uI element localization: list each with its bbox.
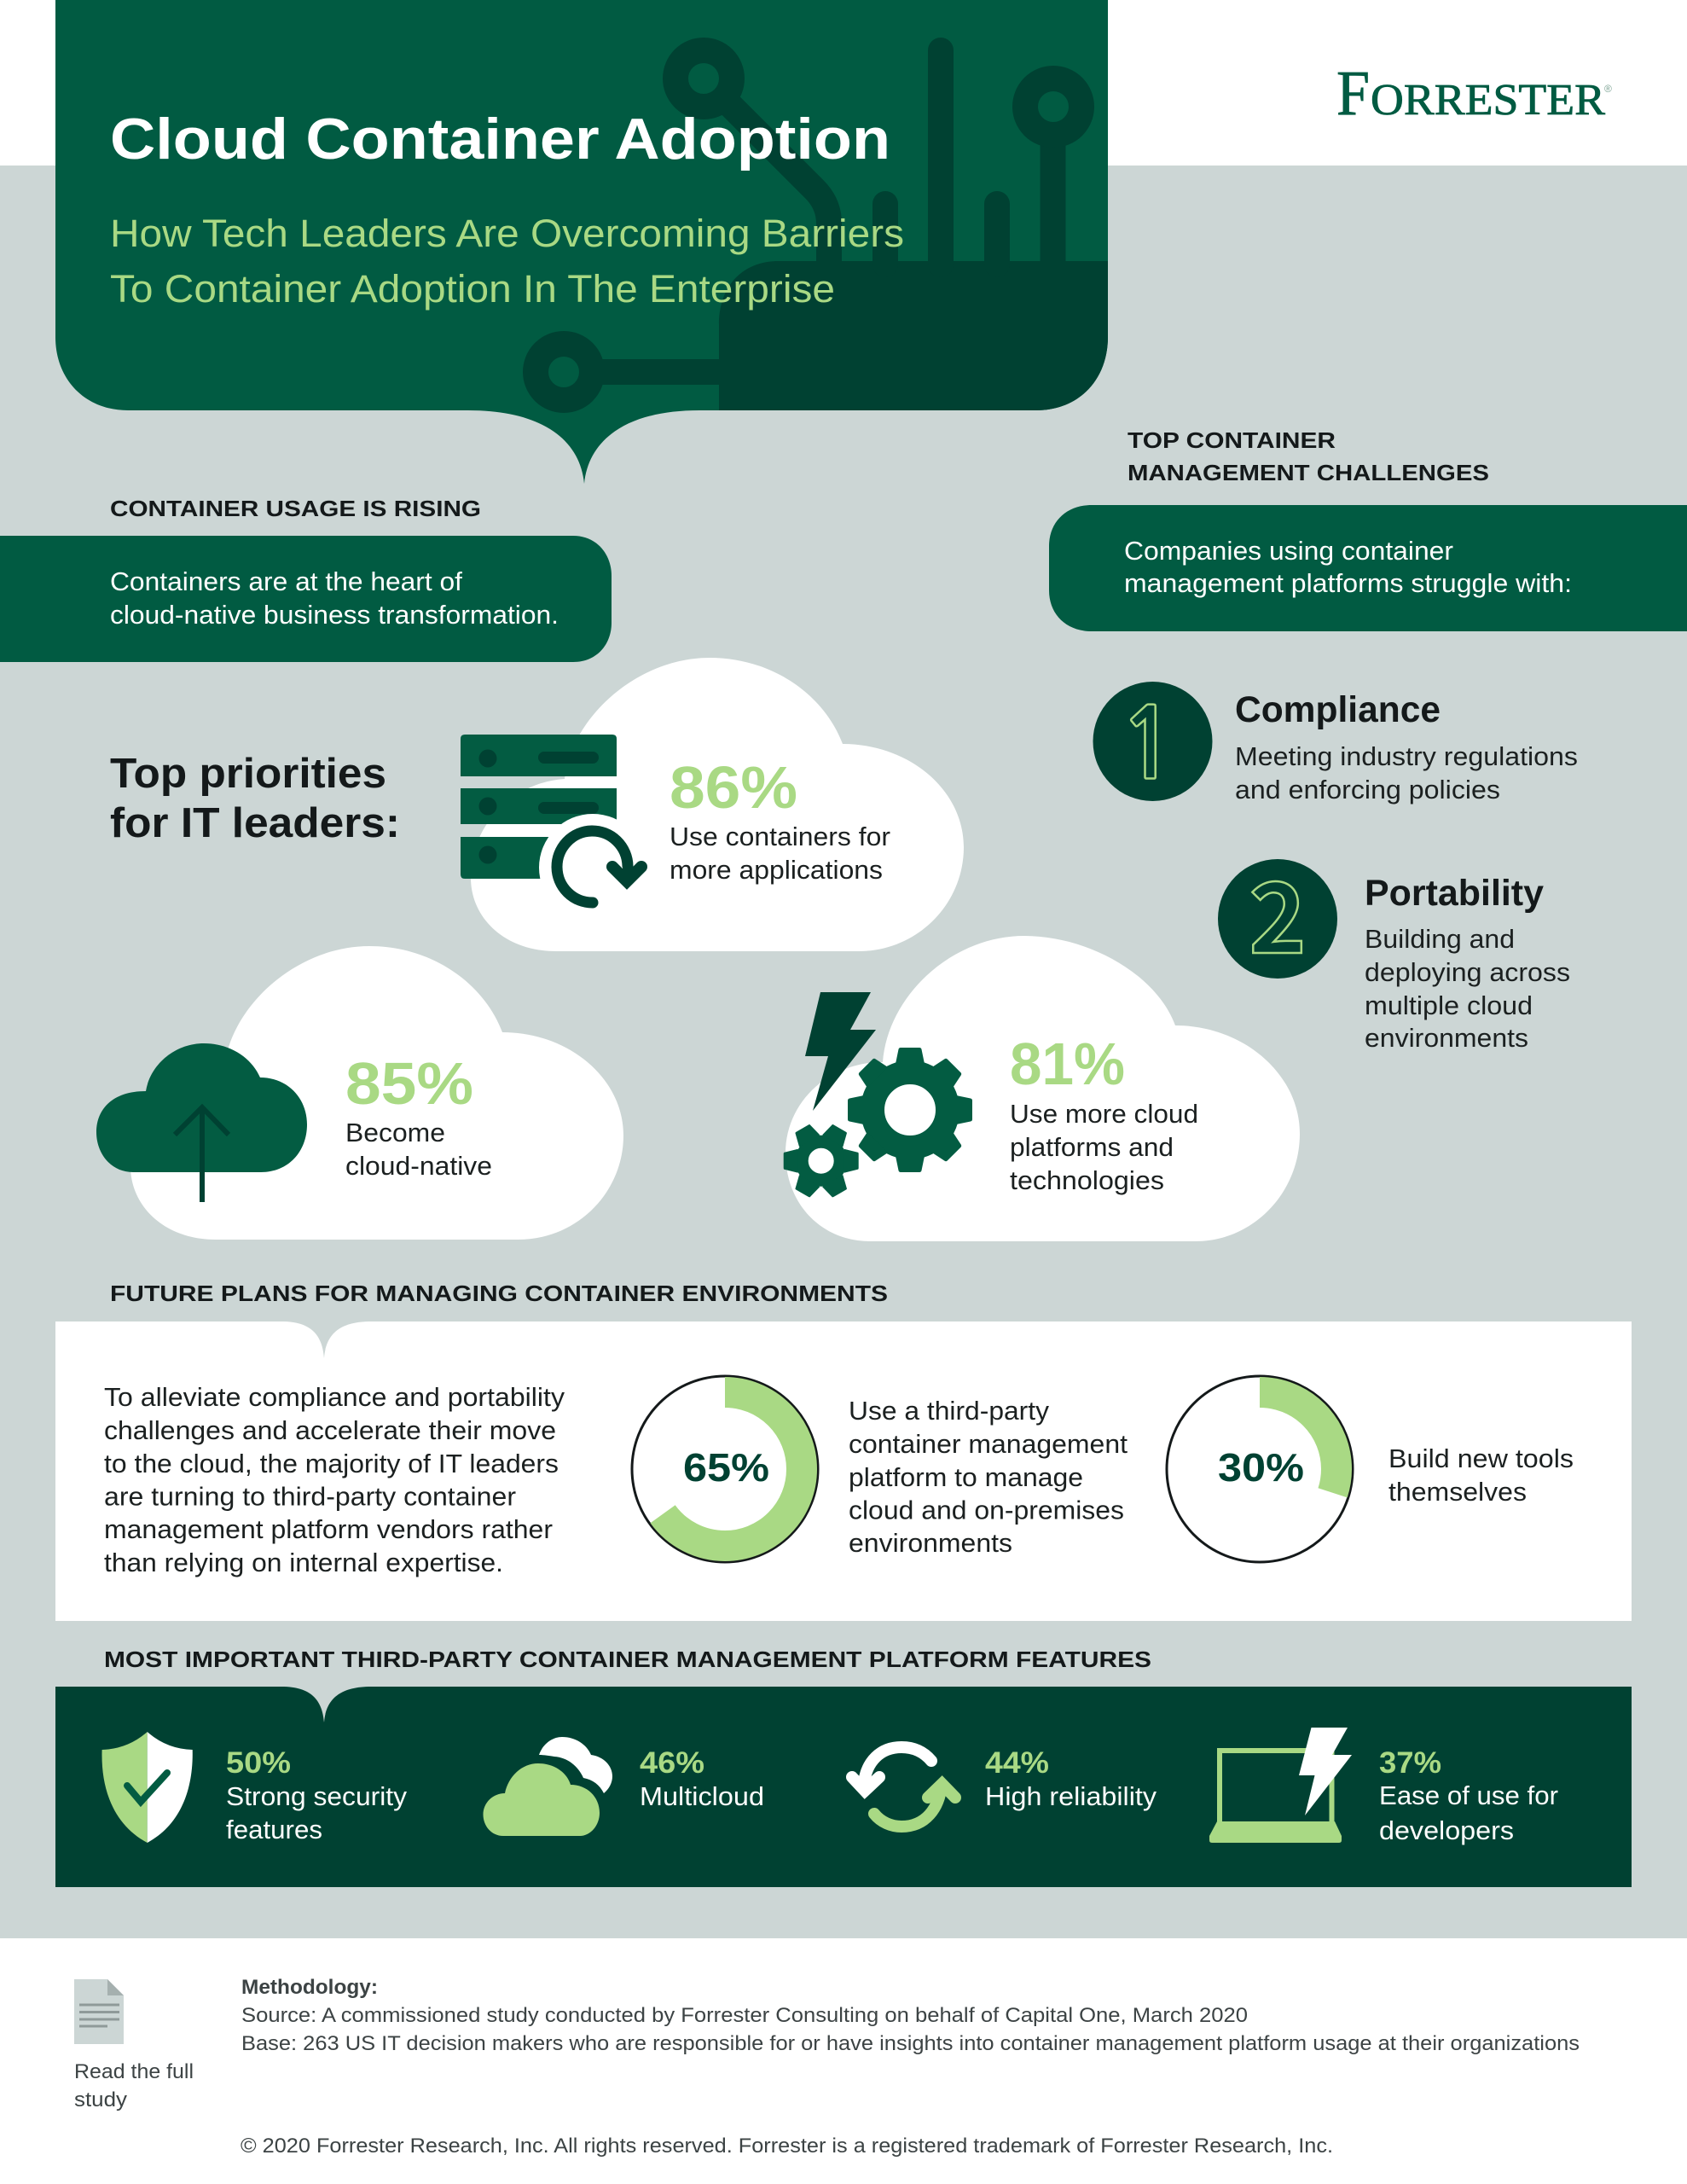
text block: future plans intro	[104, 1382, 565, 1577]
text: methodology: Source: A commissioned study conducted by Forrester Consulting on behalf of Capital One, March 2020	[241, 2004, 1248, 2027]
challenge 2: portability: deploying across	[1365, 957, 1570, 987]
subtitle: To Container Adoption In The Enterprise	[110, 267, 835, 311]
challenge 2: portability: multiple cloud	[1365, 990, 1533, 1020]
panel: container usage band: Containers are at the heart of	[110, 566, 462, 596]
challenge 2: portability: Building and	[1365, 924, 1515, 954]
cloud: 81 percent: 81%	[1010, 1031, 1125, 1097]
icon: two clouds	[483, 1737, 612, 1836]
heading: top challenges: MANAGEMENT CHALLENGES	[1128, 460, 1489, 485]
challenge 2: portability: Portability	[1365, 873, 1544, 914]
text: read the full study	[74, 2060, 194, 2111]
panel: challenges band: management platforms struggle with:	[1124, 568, 1572, 598]
donut chart: 65 percent: 65%	[683, 1445, 769, 1490]
text: copyright: © 2020 Forrester Research, Inc. All rights reserved. Forrester is a registered trademark of Forrester Research, Inc.	[241, 2135, 1333, 2158]
text block: future plans intro: are turning to third-party container	[104, 1481, 516, 1512]
feature: ease of use: Ease of use for	[1379, 1780, 1558, 1810]
feature: ease of use: developers	[1379, 1815, 1514, 1845]
icon: document	[74, 1979, 124, 2044]
panel: future plans	[55, 1321, 1632, 1621]
cloud: 81 percent	[784, 936, 1300, 1241]
heading: top priorities: for IT leaders:	[110, 800, 400, 846]
panel: container usage band	[0, 536, 612, 662]
icon: sync arrows	[852, 1747, 955, 1827]
challenge 1: compliance: 1	[1118, 696, 1178, 793]
feature: reliability: High reliability	[985, 1781, 1157, 1811]
text block: future plans intro: To alleviate compliance and portability	[104, 1382, 565, 1412]
text block: future plans intro: than relying on internal expertise.	[104, 1548, 503, 1577]
cloud: 85 percent	[96, 946, 623, 1240]
cloud: 81 percent: technologies	[1010, 1165, 1164, 1195]
text: methodology: Methodology:	[241, 1976, 378, 1999]
donut chart: 65 percent	[632, 1376, 818, 1562]
text: third-party platform: platform to manage	[849, 1462, 1083, 1492]
challenge 2: portability: 2	[1249, 840, 1307, 981]
subtitle: How Tech Leaders Are Overcoming Barriers	[110, 212, 904, 255]
challenge 2: portability: environments	[1365, 1023, 1528, 1053]
donut chart: 30 percent: 30%	[1218, 1445, 1304, 1490]
feature: multicloud: Multicloud	[640, 1781, 764, 1811]
heading: top challenges	[1128, 427, 1489, 485]
text: build new tools	[1388, 1443, 1574, 1507]
feature: security: features	[226, 1815, 322, 1844]
feature: ease of use	[1209, 1728, 1558, 1845]
logo: Forrester: F	[1336, 58, 1370, 129]
icon: lightning and gears	[784, 992, 972, 1199]
panel: platform features	[55, 1687, 1632, 1887]
challenge 1: compliance: and enforcing policies	[1235, 775, 1500, 804]
text: build new tools: Build new tools	[1388, 1443, 1574, 1473]
text: third-party platform: environments	[849, 1528, 1012, 1558]
feature: multicloud: 46%	[640, 1746, 704, 1780]
text: methodology	[241, 1976, 1580, 2055]
heading: platform features: MOST IMPORTANT THIRD-PARTY CONTAINER MANAGEMENT PLATFORM FEATURES	[104, 1647, 1151, 1672]
text: third-party platform: cloud and on-premises	[849, 1495, 1124, 1525]
text: third-party platform	[849, 1396, 1128, 1558]
heading: container usage: CONTAINER USAGE IS RISING	[110, 496, 481, 521]
logo: Forrester: ®	[1604, 83, 1612, 95]
icon: large gear	[848, 1048, 972, 1172]
title: Cloud Container Adoption	[110, 107, 890, 171]
cloud: 85 percent: 85%	[345, 1050, 473, 1117]
icon: shield	[101, 1732, 193, 1843]
feature: security: Strong security	[226, 1781, 407, 1811]
heading: top priorities: Top priorities	[110, 751, 386, 797]
logo: Forrester: ORRESTER	[1371, 76, 1605, 125]
heading: future plans: FUTURE PLANS FOR MANAGING CONTAINER ENVIRONMENTS	[110, 1281, 888, 1306]
cloud: 81 percent: Use more cloud	[1010, 1099, 1198, 1129]
cloud: 85 percent: cloud-native	[345, 1151, 492, 1181]
cloud: 86 percent	[461, 658, 964, 951]
text: read the full study: study	[74, 2088, 127, 2111]
text: build new tools: themselves	[1388, 1477, 1527, 1507]
panel: challenges band: Companies using container	[1124, 536, 1453, 566]
challenge 2: portability	[1218, 840, 1570, 1053]
icon: small gear	[784, 1123, 859, 1199]
feature: ease of use: 37%	[1379, 1746, 1441, 1780]
cloud: 81 percent: platforms and	[1010, 1132, 1174, 1162]
feature: reliability	[852, 1746, 1157, 1827]
header banner	[55, 0, 1108, 484]
heading: top challenges: TOP CONTAINER	[1128, 427, 1336, 453]
panel: container usage band: cloud-native business transformation.	[110, 600, 559, 630]
challenge 1: compliance	[1093, 682, 1578, 804]
text: third-party platform: container management	[849, 1429, 1128, 1459]
text: methodology: Base: 263 US IT decision makers who are responsible for or have insights into container management platform usage at their organizations	[241, 2032, 1580, 2055]
feature: multicloud	[483, 1737, 764, 1836]
text: third-party platform: Use a third-party	[849, 1396, 1050, 1426]
logo: Forrester	[1336, 58, 1612, 129]
subtitle	[110, 212, 904, 311]
heading: top priorities	[110, 751, 400, 846]
text: read the full study: Read the full	[74, 2060, 194, 2083]
donut chart: 30 percent	[1167, 1376, 1353, 1562]
cloud: 86 percent: Use containers for	[670, 822, 890, 851]
cloud: 85 percent: Become	[345, 1118, 445, 1147]
icon: server with refresh arrow	[461, 735, 646, 921]
feature: reliability: 44%	[985, 1746, 1049, 1780]
text block: future plans intro: management platform vendors rather	[104, 1514, 553, 1544]
cloud: 86 percent: 86%	[670, 754, 797, 821]
icon: laptop with bolt	[1209, 1728, 1352, 1843]
feature: security	[101, 1732, 407, 1844]
icon: circuit board	[536, 50, 1108, 410]
feature: security: 50%	[226, 1746, 291, 1780]
challenge 1: compliance: Meeting industry regulations	[1235, 741, 1578, 771]
icon: cloud upload	[96, 1043, 307, 1202]
cloud: 86 percent: more applications	[670, 855, 883, 885]
panel: challenges band	[1049, 505, 1687, 631]
challenge 1: compliance: Compliance	[1235, 689, 1441, 730]
text block: future plans intro: challenges and accelerate their move	[104, 1415, 556, 1445]
text block: future plans intro: to the cloud, the majority of IT leaders	[104, 1449, 559, 1478]
